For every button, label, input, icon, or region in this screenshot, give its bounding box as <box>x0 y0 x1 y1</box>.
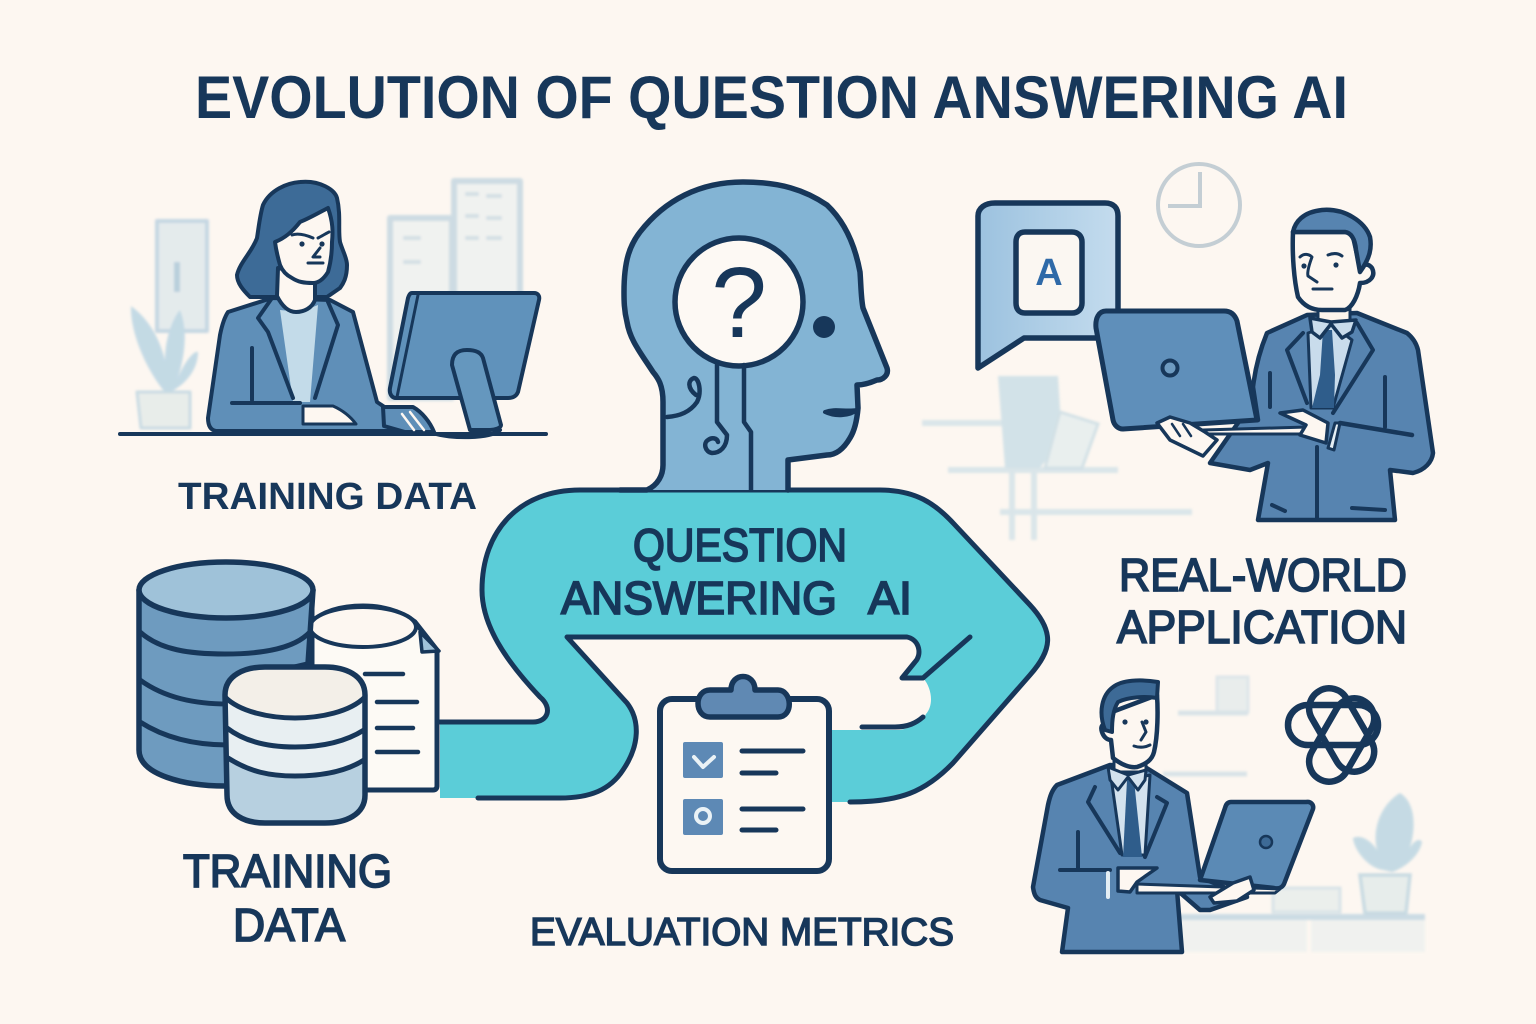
neck and face <box>277 268 315 312</box>
small cylinder <box>225 667 365 823</box>
label: question answering ai: AI <box>868 572 912 624</box>
large cylinder <box>139 590 313 786</box>
mouth <box>825 410 857 415</box>
icon: chat bubble with letter A <box>978 203 1118 368</box>
head <box>1101 695 1158 767</box>
label: question answering ai <box>561 519 912 624</box>
title: EVOLUTION OF QUESTION ANSWERING AI <box>195 64 1348 131</box>
document <box>312 590 437 790</box>
illustration: man with laptop, upper right <box>1096 210 1433 520</box>
label: question answering ai: QUESTION <box>633 519 847 571</box>
illustration: analyst at desktop computer <box>120 181 546 437</box>
label: real-world application: APPLICATION <box>1117 601 1407 653</box>
circuit lines <box>667 365 751 490</box>
neck and collar <box>1114 755 1146 772</box>
shirt and tie <box>1110 770 1150 855</box>
lapels <box>1270 323 1385 520</box>
label: training data (lower): DATA <box>233 899 345 951</box>
label: real-world application: REAL-WORLD <box>1119 549 1407 601</box>
monitor <box>390 293 539 398</box>
label: evaluation metrics: EVALUATION METRICS <box>530 911 954 954</box>
icon: wall clock <box>1158 164 1240 246</box>
suit <box>1033 765 1247 952</box>
lapels <box>232 298 338 403</box>
question mark circle <box>675 238 803 366</box>
connector ribbon: question answering flow <box>440 490 1048 802</box>
label: training data (lower): TRAINING <box>183 845 392 897</box>
illustration: AI head with question mark: ? <box>711 247 767 359</box>
shirt and tie <box>1308 325 1352 408</box>
laptop <box>1200 802 1313 888</box>
shirt <box>280 305 318 402</box>
laptop <box>1096 311 1257 429</box>
icon: knot logo <box>1288 681 1381 789</box>
hands <box>1157 417 1217 456</box>
illustration: man with laptop, lower right <box>1033 680 1313 952</box>
label: training data (upper): TRAINING DATA <box>178 476 477 518</box>
icon: evaluation clipboard <box>660 676 829 871</box>
illustration: faded office furniture <box>922 376 1192 540</box>
desk <box>120 432 546 436</box>
hair <box>237 182 347 297</box>
label: question answering ai: ANSWERING <box>561 572 837 624</box>
illustration: AI head with question mark <box>620 182 887 490</box>
illustration: faded background items, lower right <box>1163 677 1425 952</box>
icon: database stack with document <box>139 562 439 823</box>
eye <box>813 316 835 338</box>
label: real-world application <box>1117 549 1407 653</box>
head <box>1293 232 1373 310</box>
hands <box>1118 868 1157 892</box>
lapels <box>1060 787 1167 870</box>
neck and collar <box>1318 304 1350 322</box>
suit <box>1210 313 1433 520</box>
jacket <box>208 298 420 431</box>
icon: chat bubble with letter A: A <box>1035 252 1063 294</box>
hands <box>303 406 356 424</box>
label: training data (lower) <box>183 845 392 951</box>
